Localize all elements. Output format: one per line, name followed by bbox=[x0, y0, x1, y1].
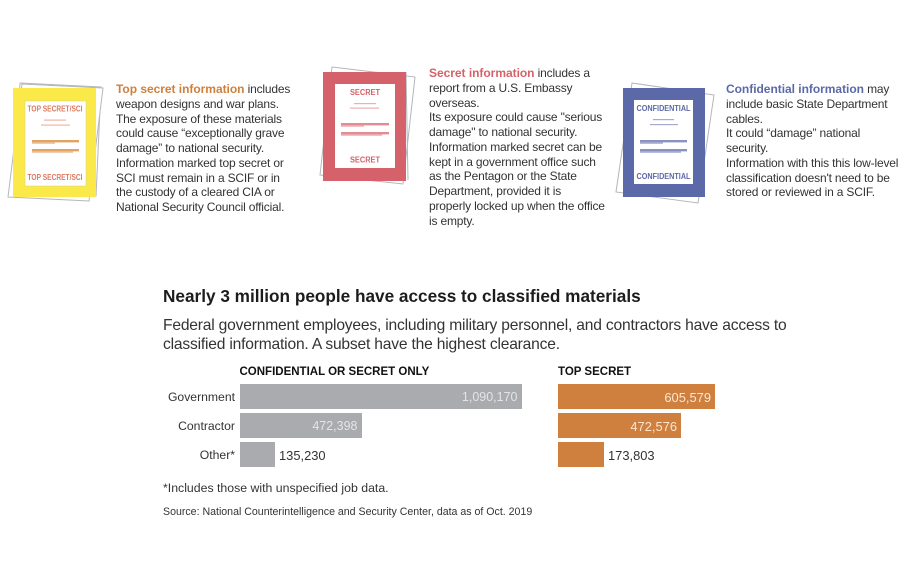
row label: contractor: Contractor bbox=[178, 419, 235, 433]
bar: government, top secret: 605,579 bbox=[664, 390, 711, 405]
bar: government, confidential or secret bbox=[240, 384, 522, 409]
chart description: Federal government employees, including military personnel, and contractors have access to bbox=[163, 316, 786, 334]
text: top secret information: Top secret information includes bbox=[116, 82, 290, 96]
document icon: top secret: TOP SECRET/SCI bbox=[28, 173, 82, 182]
document icon: confidential: CONFIDENTIAL bbox=[636, 104, 691, 113]
chart heading: Nearly 3 million people have access to classified materials bbox=[163, 286, 641, 306]
text: top secret information: Information marked top secret or bbox=[116, 156, 284, 170]
document icon: top secret bbox=[8, 82, 104, 202]
text: secret information: report from a U.S. Embassy bbox=[429, 81, 572, 95]
text: secret information: Department, provided it is bbox=[429, 184, 561, 198]
text: confidential information bbox=[726, 82, 898, 199]
text: secret information bbox=[429, 66, 605, 228]
text: top secret information: The exposure of these materials bbox=[116, 112, 282, 126]
document icon: top secret: TOP SECRET/SCI bbox=[28, 104, 82, 114]
document icon: secret: SECRET bbox=[350, 88, 380, 97]
text: secret information: properly locked up when the office bbox=[429, 199, 605, 213]
row label: government: Government bbox=[168, 390, 235, 404]
text: top secret information: could cause “exceptionally grave bbox=[116, 126, 284, 140]
text: confidential information: security. bbox=[726, 141, 768, 155]
column heading: confidential or secret only: CONFIDENTIAL OR SECRET ONLY bbox=[240, 366, 429, 378]
text: secret information: is empty. bbox=[429, 214, 475, 228]
text: top secret information: weapon designs and war plans. bbox=[116, 97, 279, 111]
bar: government, top secret bbox=[558, 384, 715, 409]
chart description: classified information. A subset have the highest clearance. bbox=[163, 336, 560, 353]
document icon: secret bbox=[320, 66, 416, 184]
document icon: confidential bbox=[616, 82, 714, 204]
bar: contractor, top secret: 472,576 bbox=[630, 419, 677, 434]
value: other, confidential or secret: 135,230 bbox=[279, 448, 326, 462]
text: confidential information: Information with this this low-level bbox=[726, 156, 898, 170]
text: confidential information: stored or reviewed in a SCIF. bbox=[726, 185, 875, 199]
text: confidential information: classification doesn't need to be bbox=[726, 170, 890, 184]
text: secret information: Its exposure could cause "serious bbox=[429, 110, 602, 124]
footnote: *Includes those with unspecified job data. bbox=[163, 481, 389, 495]
text: confidential information: Confidential information may bbox=[726, 82, 889, 96]
source: Source: National Counterintelligence and Security Center, data as of Oct. 2019 bbox=[163, 506, 532, 518]
row label: other: Other* bbox=[200, 448, 235, 462]
text: secret information: kept in a government office such bbox=[429, 154, 596, 168]
bar: contractor, top secret bbox=[558, 413, 681, 438]
value: other, top secret: 173,803 bbox=[608, 448, 655, 462]
bar: other, confidential or secret bbox=[240, 442, 274, 466]
chart description bbox=[163, 316, 786, 353]
text: confidential information: include basic State Department bbox=[726, 97, 887, 111]
text: secret information: Information marked secret can be bbox=[429, 140, 602, 154]
text: top secret information: National Security Council official. bbox=[116, 200, 284, 214]
column heading: top secret: TOP SECRET bbox=[558, 366, 631, 378]
text: secret information: as the Pentagon or the State bbox=[429, 169, 577, 183]
text: top secret information: SCI must remain in a SCIF or in bbox=[116, 170, 280, 184]
bar: government, confidential or secret: 1,090,170 bbox=[462, 390, 518, 404]
text: top secret information: the custody of a cleared CIA or bbox=[116, 185, 275, 199]
text: secret information: overseas. bbox=[429, 96, 479, 110]
text: confidential information: cables. bbox=[726, 112, 763, 126]
text: secret information: damage" to national security. bbox=[429, 125, 577, 139]
bar: contractor, confidential or secret bbox=[240, 413, 362, 438]
text: top secret information: damage” to national security. bbox=[116, 141, 264, 155]
bar: other, top secret bbox=[558, 442, 604, 466]
text: secret information: Secret information includes a bbox=[429, 66, 590, 80]
bar: contractor, confidential or secret: 472,398 bbox=[312, 419, 358, 433]
document icon: confidential: CONFIDENTIAL bbox=[636, 172, 691, 181]
text: confidential information: It could “damage” national bbox=[726, 126, 860, 140]
document icon: secret: SECRET bbox=[350, 156, 380, 164]
text: top secret information bbox=[116, 82, 290, 214]
